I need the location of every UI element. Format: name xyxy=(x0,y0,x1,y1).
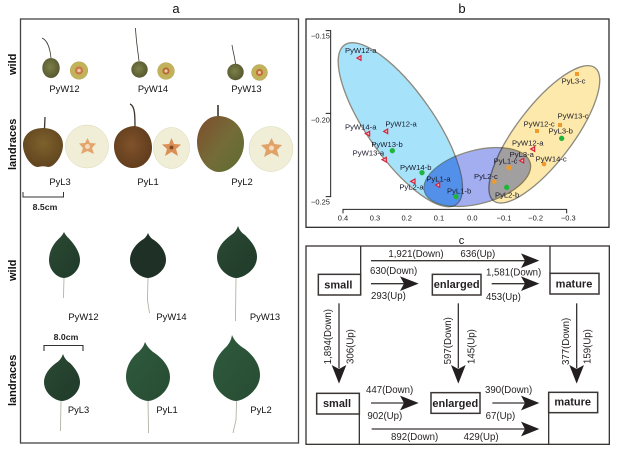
panel c: flow diagram xyxy=(306,246,609,444)
leaf: PyW13 xyxy=(217,226,280,322)
arrow: enlarged down xyxy=(451,303,466,384)
horizontal counts: 892(Down) xyxy=(391,432,438,443)
x axis: 0.2 xyxy=(401,214,412,223)
fruit: PyW14 xyxy=(131,28,174,94)
point labels: PyL2-b xyxy=(495,191,519,200)
box: small bottom xyxy=(317,393,359,414)
leaf: PyL1 xyxy=(126,342,178,433)
panel b title: b xyxy=(458,1,466,16)
label: landraces leaves: landraces xyxy=(7,355,19,406)
leaf: PyL1: PyL1 xyxy=(156,404,178,415)
vertical counts: 1,894(Down) xyxy=(323,309,334,364)
fruit: PyW12 xyxy=(42,38,88,94)
fruit: PyW12: PyW12 xyxy=(49,83,80,94)
point labels: PyW14-b xyxy=(400,163,431,172)
vertical counts: 159(Up) xyxy=(583,329,594,364)
box: mature top: mature xyxy=(556,278,592,290)
point labels: PyW13-a xyxy=(353,149,385,158)
x axis: 0.0 xyxy=(467,214,478,223)
box: enlarged bottom: enlarged xyxy=(432,398,478,410)
fruit: PyL1 xyxy=(114,104,190,187)
point labels: PyL1-c xyxy=(494,157,518,166)
point labels: PyW12-a xyxy=(345,46,377,55)
panel b: PCA scatter plot xyxy=(306,19,617,227)
point labels: PyL2-c xyxy=(474,172,498,181)
x axis xyxy=(338,209,576,223)
fruit: PyL3: PyL3 xyxy=(49,176,71,187)
y axis xyxy=(311,31,331,206)
horizontal counts: 67(Up) xyxy=(486,411,515,422)
point labels: PyW12-a xyxy=(385,120,418,129)
orange points xyxy=(492,72,579,184)
leaf: PyW12: PyW12 xyxy=(68,311,99,322)
box: enlarged top xyxy=(432,274,481,295)
point labels: PyW12-a xyxy=(512,138,544,147)
horizontal counts: 902(Up) xyxy=(367,411,402,422)
scale bar: 8.5cm: 8.5cm xyxy=(33,202,58,212)
green circle points xyxy=(390,136,564,199)
leaf: PyW14 xyxy=(130,233,187,322)
arrow: small to enlarged bottom xyxy=(371,396,419,410)
arrow: small to mature bottom xyxy=(372,422,539,436)
horizontal counts xyxy=(366,249,541,443)
horizontal counts: 1,581(Down) xyxy=(486,267,541,278)
vertical counts: 377(Down) xyxy=(561,318,572,365)
label: wild leaves: wild xyxy=(7,260,19,282)
leaf: PyL3 xyxy=(44,354,89,431)
box: mature top xyxy=(550,273,599,294)
fruit: PyW13 xyxy=(227,45,268,94)
arrow: enlarged to mature top xyxy=(492,276,539,291)
arrow: small to enlarged top xyxy=(371,276,419,291)
vertical counts: 597(Down) xyxy=(443,317,454,364)
cluster ellipses xyxy=(338,42,600,208)
point labels: PyW13-c xyxy=(558,112,589,121)
point labels: PyL1-a xyxy=(426,175,451,184)
horizontal counts: 453(Up) xyxy=(486,292,521,303)
point labels: PyL2-a xyxy=(399,183,424,192)
y axis: −0.15 xyxy=(311,31,330,40)
scale bar: 8.0cm: 8.0cm xyxy=(54,332,79,342)
x axis: −0.1 xyxy=(497,214,511,223)
leaf: PyL3: PyL3 xyxy=(68,404,89,415)
vertical counts: 145(Up) xyxy=(466,329,477,364)
x axis: −0.3 xyxy=(561,214,576,223)
fruit: PyW14: PyW14 xyxy=(138,83,168,94)
red triangle points xyxy=(357,56,535,187)
horizontal counts: 447(Down) xyxy=(366,385,413,396)
fruit: PyW13: PyW13 xyxy=(231,83,262,94)
box: enlarged bottom xyxy=(431,393,480,413)
point labels: PyW14-c xyxy=(536,155,567,164)
scale bar: 8.5cm xyxy=(23,192,64,212)
box: enlarged top: enlarged xyxy=(434,279,480,291)
vertical counts: 306(Up) xyxy=(345,329,356,364)
panel c title: c xyxy=(459,235,465,247)
box: mature bottom: mature xyxy=(554,397,591,409)
box: small top: small xyxy=(324,279,352,291)
box: mature bottom xyxy=(549,392,598,413)
horizontal counts: 636(Up) xyxy=(460,249,495,260)
point labels: PyL3-a xyxy=(510,150,535,159)
arrow: mature down xyxy=(569,303,584,384)
arrow: enlarged to mature bottom xyxy=(492,396,539,410)
fruit: PyL1: PyL1 xyxy=(137,176,159,187)
vertical counts xyxy=(323,309,594,365)
y axis: −0.20 xyxy=(311,116,330,125)
horizontal counts: 1,921(Down) xyxy=(388,249,444,260)
y axis: −0.25 xyxy=(311,197,330,206)
panel a title: a xyxy=(172,1,180,16)
leaf: PyL2 xyxy=(213,335,272,433)
fruit: PyL2 xyxy=(197,105,293,187)
panel a: fruits and leaves xyxy=(7,19,298,443)
fruit: PyL3 xyxy=(23,117,108,187)
label: wild fruits: wild xyxy=(7,54,19,76)
box: small bottom: small xyxy=(323,398,351,410)
point labels: PyW13-b xyxy=(371,140,403,149)
x axis: 0.4 xyxy=(338,214,348,223)
leaf: PyW12 xyxy=(49,232,99,322)
leaf: PyL2: PyL2 xyxy=(250,404,272,415)
box: small top xyxy=(318,274,361,295)
frame connectors xyxy=(359,246,550,444)
x axis: −0.2 xyxy=(528,214,543,223)
point labels: PyL1-b xyxy=(447,187,471,196)
point labels: PyL3-b xyxy=(549,127,573,136)
x axis: 0.1 xyxy=(434,214,444,223)
leaf: PyW13: PyW13 xyxy=(250,311,280,322)
leaf: PyW14: PyW14 xyxy=(156,311,187,322)
horizontal counts: 429(Up) xyxy=(464,432,499,443)
x axis: 0.3 xyxy=(370,214,380,223)
point labels: PyW12-c xyxy=(524,120,555,129)
arrow: small down xyxy=(332,303,346,384)
point labels: PyL3-c xyxy=(562,77,586,86)
horizontal counts: 293(Up) xyxy=(371,291,406,302)
scale bar: 8.0cm xyxy=(44,332,83,351)
label: landraces fruits: landraces xyxy=(7,119,19,170)
point labels: PyW14-a xyxy=(345,123,377,132)
horizontal counts: 390(Down) xyxy=(485,385,532,396)
horizontal counts: 630(Down) xyxy=(370,266,417,277)
arrow: small to mature top xyxy=(371,253,539,268)
point labels xyxy=(345,46,589,200)
fruit: PyL2: PyL2 xyxy=(231,176,253,187)
